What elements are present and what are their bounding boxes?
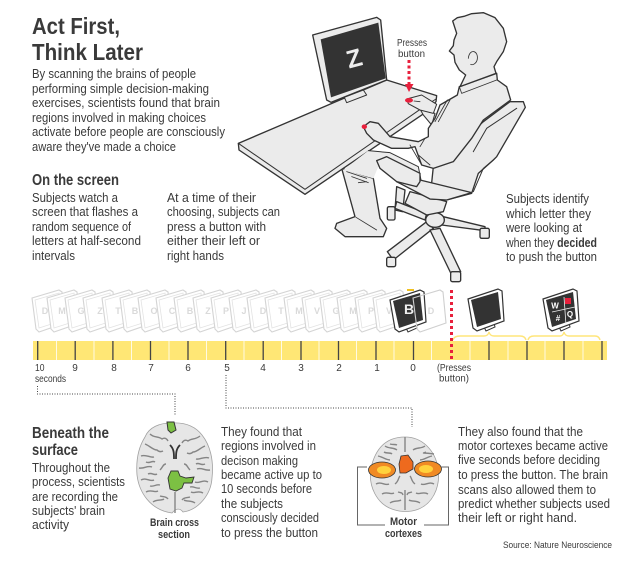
motor brain: [368, 437, 442, 512]
brain outline: [370, 437, 439, 512]
faded letters: B: [132, 306, 139, 316]
intro text: regions involved in making choices: [32, 111, 206, 125]
monitor: letter D: D: [428, 306, 435, 316]
text: they also found: motor cortexes became active: [458, 439, 608, 453]
faded letters: T: [115, 306, 121, 316]
caption: motor cortexes: Motor: [390, 516, 418, 528]
label: presses button: Presses: [397, 38, 427, 49]
brain cross section: [137, 422, 213, 513]
brain folds: [139, 434, 210, 513]
faded letters: G: [332, 306, 340, 316]
text: they also found: their left or right hand.: [458, 511, 577, 525]
caption: brain cross section: [150, 517, 199, 541]
monitor: letter grid: #: [556, 314, 561, 323]
text: subjects identify: to push the button: [506, 250, 597, 264]
timeline labels: 5: [224, 363, 230, 374]
text: throughout the process: [32, 461, 125, 532]
timeline labels: 6: [185, 363, 191, 374]
timeline labels: [35, 363, 471, 385]
faded letters: C: [169, 306, 176, 316]
half-second divisions: [56, 341, 583, 360]
text: they also found: to press the button. The brain: [458, 468, 608, 482]
brain ventricles: [170, 445, 180, 459]
text: subjects watch: Subjects watch a: [32, 191, 118, 205]
activation: central: [168, 471, 194, 491]
text: they found that: the subjects: [221, 497, 283, 511]
monitor letter: Z: [343, 43, 365, 74]
braces: [453, 332, 600, 340]
timeline labels: button): [439, 374, 469, 384]
title: Act First,: [32, 13, 120, 39]
intro text: By scanning the brains of people: [32, 67, 196, 81]
faded letters: P: [368, 306, 374, 316]
text: throughout the process: process, scientists: [32, 475, 125, 489]
faded letters: O: [150, 306, 158, 316]
text: throughout the process: subjects' brain: [32, 504, 105, 518]
text: subjects identify: Subjects identify: [506, 192, 590, 206]
connector: 5 seconds to motor: [226, 375, 412, 427]
icon: monitor: [313, 17, 387, 102]
caption: brain cross section: Brain cross: [150, 517, 199, 529]
activation: center: [399, 455, 413, 473]
source: Source: Nature Neuroscience: [503, 540, 612, 550]
heading: beneath the surface: surface: [32, 442, 78, 459]
text: at a time of their choosing: choosing, subjects can: [167, 205, 280, 219]
text: they also found: [458, 425, 610, 525]
text: throughout the process: activity: [32, 518, 70, 532]
text: subjects watch: intervals: [32, 249, 75, 263]
activation: left: [368, 462, 396, 478]
activation: right: [414, 461, 442, 477]
icon: ear: [468, 52, 477, 65]
icon: head: [449, 13, 507, 87]
timeline labels: 7: [148, 363, 154, 374]
intro text: aware they've made a choice: [32, 140, 176, 154]
caption: motor cortexes: [385, 516, 422, 540]
text: subjects identify: when they decided: [505, 236, 597, 250]
icon: monitor screen: [321, 23, 386, 97]
icon: leg and shoe: [335, 168, 387, 237]
icon: thigh: [343, 151, 422, 183]
text: at a time of their choosing: At a time of their: [167, 191, 256, 205]
text: at a time of their choosing: [167, 191, 280, 263]
text: they found that: decison making: [221, 454, 298, 468]
timeline bar: [33, 341, 607, 360]
text: subjects watch: random sequence of: [32, 220, 131, 234]
text: at a time of their choosing: press a button with: [167, 220, 266, 234]
timeline monitors: [32, 289, 579, 332]
faded letters: V: [314, 306, 320, 316]
text: subjects identify: [505, 192, 597, 264]
connector: 10 seconds to brain: [38, 386, 175, 415]
icon: seat: [377, 157, 472, 200]
text: they found that: consciously decided: [221, 511, 319, 525]
red press line: [450, 290, 453, 360]
text: they found that: to press the button: [221, 526, 318, 540]
icon: chair base: [387, 187, 489, 282]
illustration: subject at desk: [238, 13, 525, 282]
timeline labels: seconds: [35, 374, 66, 385]
heading: beneath the surface: Beneath the: [32, 425, 109, 442]
arrow: presses button: [405, 60, 414, 92]
timeline labels: 1: [374, 363, 380, 374]
text: subjects watch: screen that flashes a: [32, 205, 138, 219]
text: subjects identify: were looking at: [505, 221, 582, 235]
faded monitors: [32, 290, 406, 332]
monitor: blank: [468, 289, 504, 331]
faded letters: G: [77, 306, 85, 316]
caption: brain cross section: section: [158, 529, 190, 541]
text: at a time of their choosing: right hands: [167, 249, 224, 263]
monitor: letter grid: [543, 289, 579, 331]
intro text: activate before people are consciously: [32, 125, 226, 139]
timeline labels: 2: [336, 363, 342, 374]
monitor: letter D: [413, 290, 446, 332]
faded letters: V: [386, 306, 392, 316]
text: they also found: They also found that the: [458, 425, 583, 439]
text: they found that: regions involved in: [221, 439, 316, 453]
brain outline: [137, 423, 213, 513]
monitor: letter B: B: [404, 301, 414, 317]
faded letters: T: [278, 306, 284, 316]
timeline labels: 10: [35, 363, 45, 374]
intro text: [32, 67, 226, 154]
second ticks: [38, 341, 602, 360]
faded letters: Z: [205, 306, 211, 316]
text: subjects watch: letters at half-second: [32, 234, 141, 248]
intro text: performing simple decision-making: [32, 82, 209, 96]
monitor: letter B: [390, 290, 426, 332]
title: Think Later: [32, 39, 143, 65]
monitor: letter grid: W: [551, 302, 559, 310]
faded letters: J: [241, 306, 247, 316]
faded letters: [42, 306, 392, 316]
timeline labels: 3: [298, 363, 304, 374]
timeline labels: 0: [410, 363, 416, 374]
text: they also found: scans also allowed them to: [458, 483, 596, 497]
icon: chair back: [430, 102, 525, 200]
text: they found that: 10 seconds before: [221, 482, 312, 496]
text: they also found: predict whether subjects used: [458, 497, 610, 511]
bracket: motor cortexes: [358, 467, 448, 525]
faded letters: P: [223, 306, 229, 316]
timeline labels: 8: [111, 363, 117, 374]
faded letters: M: [349, 306, 357, 316]
icon: red button left: [362, 124, 367, 129]
faded letters: M: [58, 306, 66, 316]
faded letters: D: [260, 306, 267, 316]
timeline labels: 4: [260, 363, 266, 374]
title: [32, 13, 143, 65]
timeline labels: (Presses: [437, 363, 471, 374]
label: presses button: button: [398, 49, 425, 60]
text: subjects watch: [32, 191, 141, 263]
caption: motor cortexes: cortexes: [385, 528, 422, 540]
text: they also found: five seconds before deciding: [458, 453, 600, 467]
icon: torso and near arm: [363, 73, 511, 168]
text: they found that: They found that: [221, 425, 302, 439]
text: they found that: became active up to: [221, 468, 322, 482]
text: they found that: [221, 425, 322, 540]
brain folds: [376, 437, 434, 510]
intro text: exercises, scientists found that brain: [32, 96, 220, 110]
faded letters: Z: [97, 306, 103, 316]
activation: frontal: [167, 422, 176, 433]
heading: beneath the surface: [32, 425, 109, 459]
label: presses button: [397, 38, 427, 60]
faded letters: D: [42, 306, 49, 316]
text: throughout the process: Throughout the: [32, 461, 110, 475]
icon: far arm and hand: [405, 95, 437, 125]
marker: orange tab: [407, 289, 414, 291]
text: at a time of their choosing: either their left or: [167, 234, 260, 248]
bar: [33, 341, 607, 360]
timeline labels: 9: [72, 363, 78, 374]
icon: desk: [238, 80, 437, 194]
monitor: letter grid: Q: [567, 310, 573, 319]
icon: monitor stand: [344, 90, 367, 103]
text: subjects identify: which letter they: [505, 207, 592, 221]
heading: on the screen: On the screen: [32, 172, 119, 189]
faded letters: M: [295, 306, 303, 316]
text: throughout the process: are recording the: [32, 490, 118, 504]
faded letters: B: [187, 306, 194, 316]
